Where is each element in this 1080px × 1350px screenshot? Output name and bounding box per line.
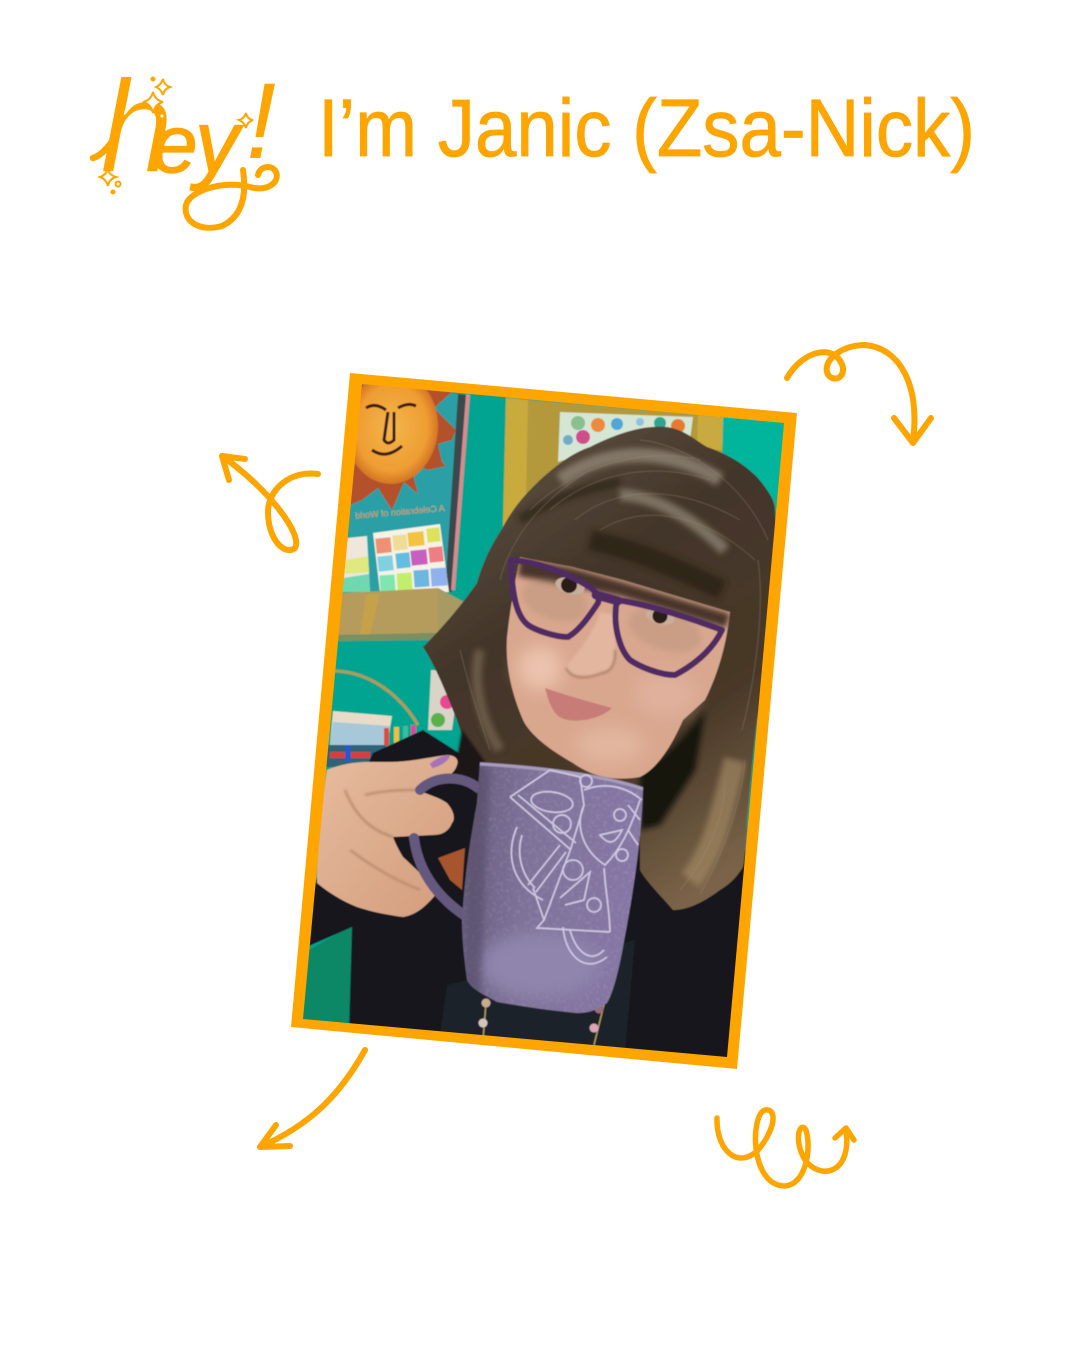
title: I’m Janic (Zsa-Nick) xyxy=(318,83,975,174)
hey lettering: ! xyxy=(246,60,276,181)
floral art xyxy=(558,412,693,462)
hey lettering: e xyxy=(152,99,198,190)
swatch papers xyxy=(342,524,449,592)
nail xyxy=(430,755,450,768)
arrow: left curl xyxy=(222,456,318,550)
poster xyxy=(348,384,471,593)
flourish loop xyxy=(186,167,277,228)
sun rays xyxy=(350,384,456,510)
photo xyxy=(303,384,784,1057)
inner blouse xyxy=(440,940,635,1052)
gold frame xyxy=(503,398,723,528)
nose xyxy=(566,612,615,677)
mug xyxy=(461,761,644,1014)
brow shadow xyxy=(518,558,730,628)
hand xyxy=(317,755,458,917)
glasses xyxy=(511,560,722,675)
lips xyxy=(545,688,612,721)
necklace xyxy=(478,998,606,1046)
eye shading xyxy=(523,576,587,621)
hey lettering: h xyxy=(100,53,173,200)
jacket xyxy=(300,730,760,1070)
mandala pattern xyxy=(510,770,642,964)
lower wall decor xyxy=(326,670,460,767)
gold shelf xyxy=(338,588,473,641)
hair xyxy=(423,427,777,910)
eyes xyxy=(554,576,586,595)
sparkles xyxy=(100,78,253,194)
face xyxy=(507,557,730,779)
lead-in stroke xyxy=(93,136,116,158)
photo frame xyxy=(291,373,797,1069)
arrow: top right curl xyxy=(787,345,931,443)
shadow around neck xyxy=(640,710,705,830)
mug handle xyxy=(414,778,478,915)
wall xyxy=(309,384,758,1023)
arrow: bottom right squiggle xyxy=(717,1110,854,1186)
hey lettering: y xyxy=(190,92,244,191)
poster caption: A Celebration of World xyxy=(355,503,445,521)
hey lettering xyxy=(93,53,277,228)
dark green lower-left wall xyxy=(303,926,353,1023)
hair strands xyxy=(460,440,768,895)
orange patch behind handle xyxy=(438,848,465,890)
arrow: bottom left xyxy=(260,1050,365,1147)
